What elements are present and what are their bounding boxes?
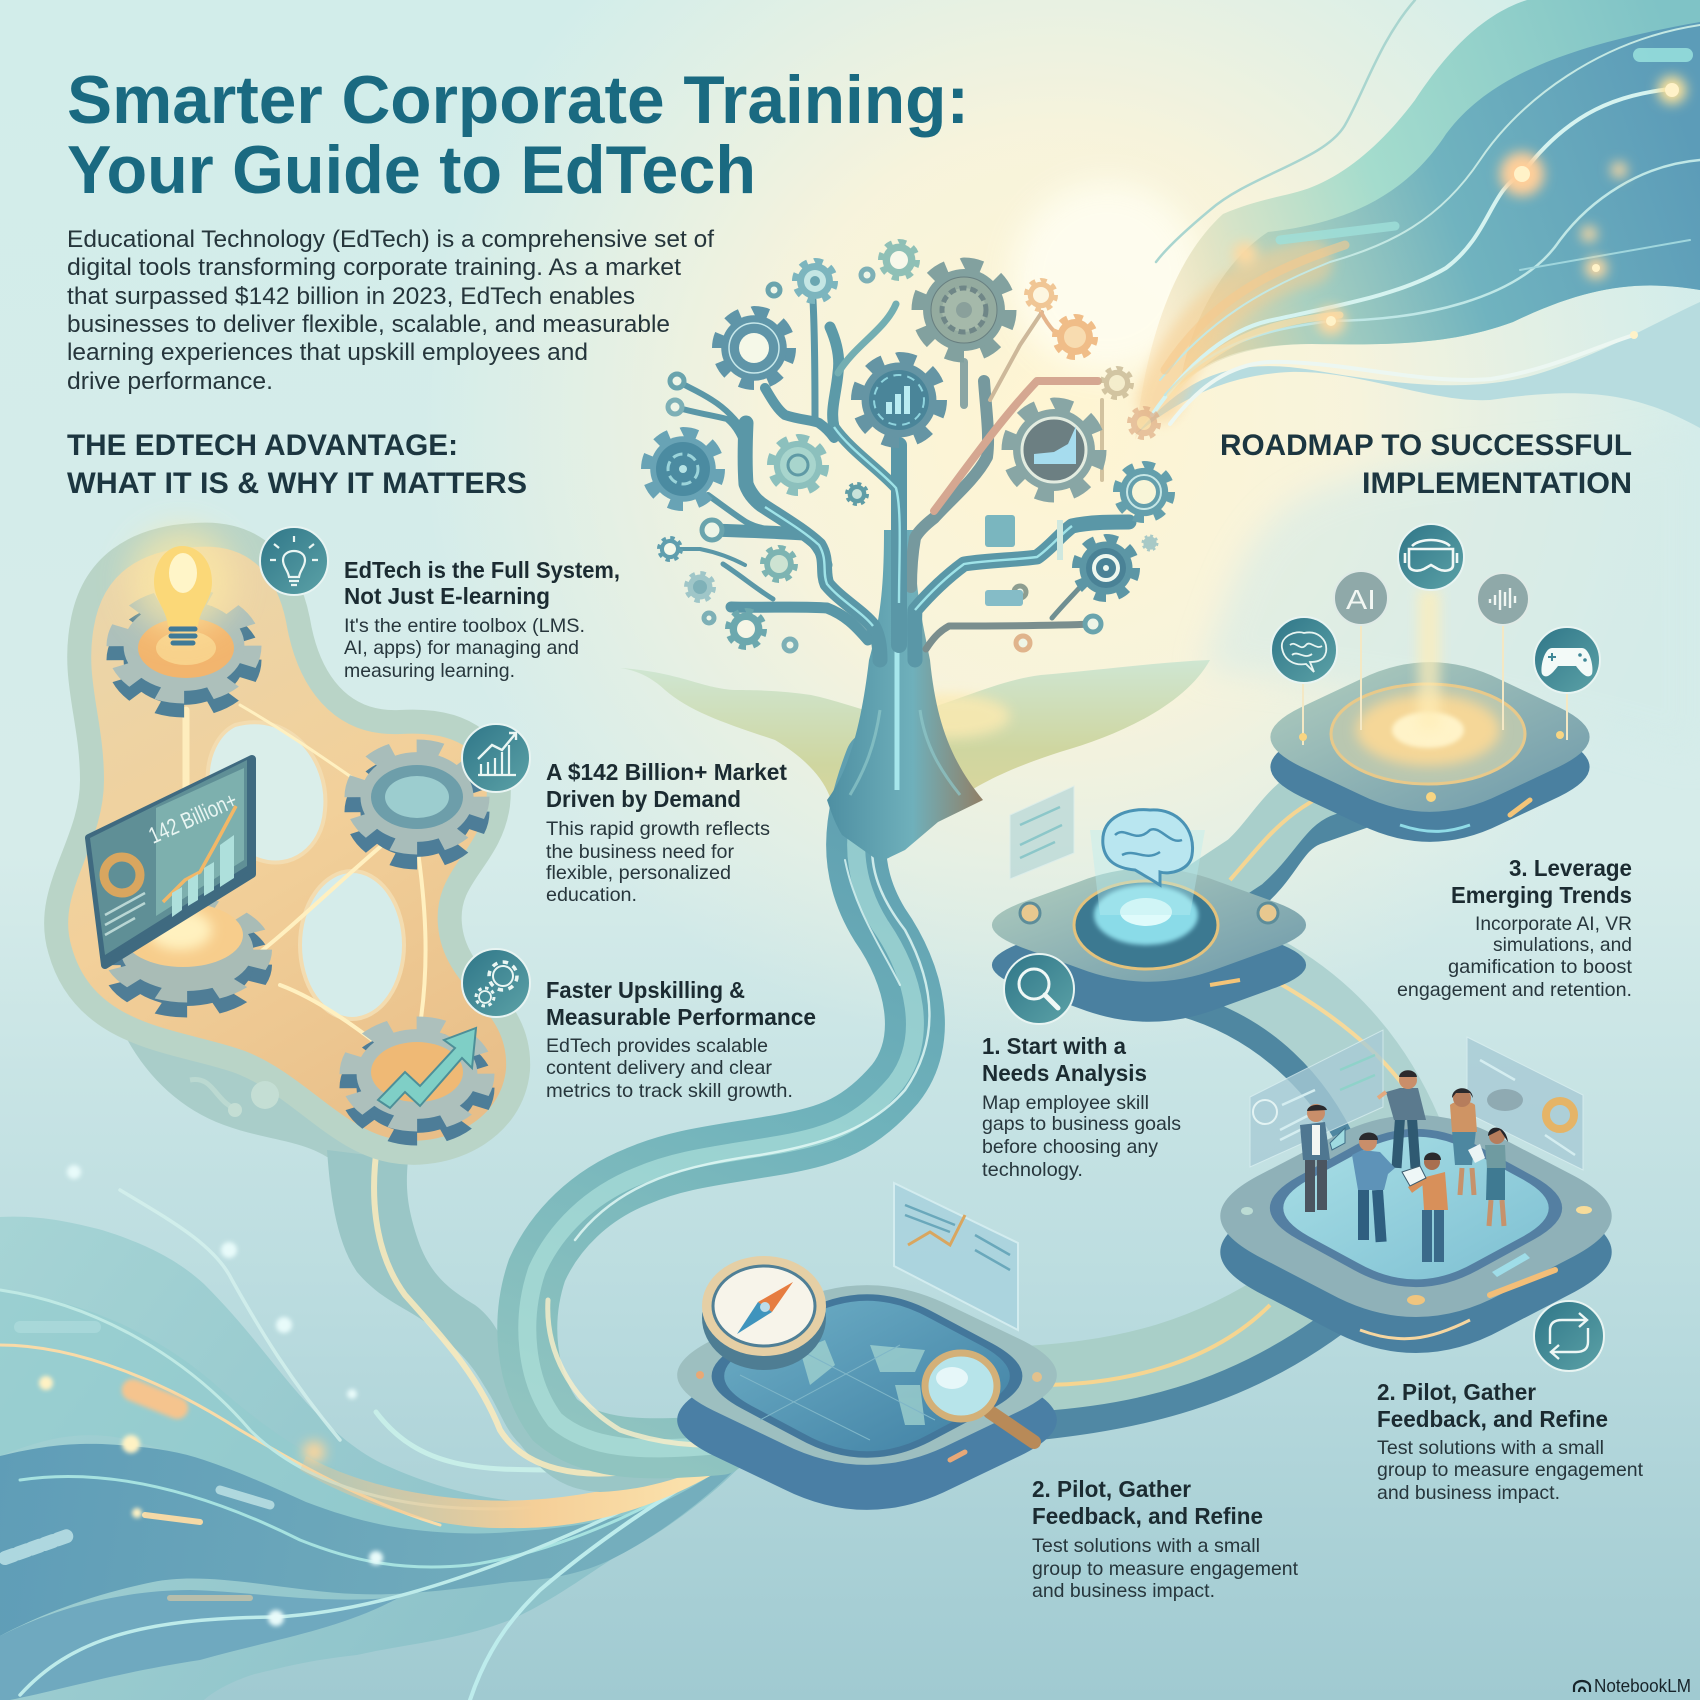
text block: market: This rapid growth reflects <box>546 818 770 840</box>
heading: roadmap <box>1220 429 1632 500</box>
text block: upskilling <box>546 977 816 1102</box>
NotebookLM mark: NotebookLM <box>1594 1676 1691 1696</box>
text block: upskilling: Measurable Performance <box>546 1004 816 1030</box>
text block: full system: It's the entire toolbox (LMS. <box>344 615 585 637</box>
bottom left flowing waves <box>0 1165 770 1700</box>
icon: VR headset badge <box>1398 524 1464 590</box>
intro paragraph: learning experiences that upskill employees and <box>67 339 588 366</box>
intro paragraph: drive performance. <box>67 368 273 395</box>
text block: step 2 lower: and business impact. <box>1032 1580 1215 1602</box>
intro paragraph <box>67 226 714 395</box>
intro paragraph: businesses to deliver flexible, scalable, and measurable <box>67 311 670 338</box>
text block: step 2 right <box>1377 1379 1644 1504</box>
text block: step 3 <box>1397 855 1633 1001</box>
gears on tree canopy <box>649 243 1169 646</box>
text block: market: the business need for <box>546 841 735 863</box>
river flowing from tree <box>527 760 929 1448</box>
text block: step 2 lower: Feedback, and Refine <box>1032 1503 1263 1529</box>
intro paragraph: digital tools transforming corporate training. As a market <box>67 254 681 281</box>
intro paragraph: Educational Technology (EdTech) is a comprehensive set of <box>67 226 714 253</box>
title: Your Guide to EdTech <box>67 132 756 208</box>
icon: chart badge <box>462 724 530 792</box>
magnifying glass <box>925 1353 1034 1442</box>
text block: market <box>546 759 787 906</box>
platform: step 2 team <box>1220 1030 1612 1353</box>
icon: gamepad badge <box>1534 627 1600 693</box>
title <box>67 62 969 208</box>
floating panel left <box>1250 1030 1383 1167</box>
text block: full system: EdTech is the Full System, <box>344 557 620 583</box>
title: Smarter Corporate Training: <box>67 62 969 138</box>
gear: light bulb <box>120 529 248 707</box>
text block: step 1: technology. <box>982 1159 1083 1181</box>
icon: light bulb badge <box>260 527 328 595</box>
hills <box>620 660 1210 830</box>
top right flowing waves <box>1135 0 1700 440</box>
tree <box>649 243 1169 862</box>
hologram brain <box>1103 810 1193 885</box>
icon: brain badge <box>1271 617 1337 683</box>
text block: step 3: engagement and retention. <box>1397 979 1632 1001</box>
text block: step 1: 1. Start with a <box>982 1033 1126 1059</box>
dashboard screen: 142 Billion+: 142 Billion+ <box>144 787 241 849</box>
text block: step 2 right: Test solutions with a small <box>1377 1437 1604 1459</box>
text block: full system <box>344 557 620 682</box>
text block: upskilling: EdTech provides scalable <box>546 1035 768 1057</box>
heading: EdTech advantage: WHAT IT IS & WHY IT MATTERS <box>67 467 527 500</box>
gear: glowing hub <box>117 903 257 1008</box>
text block: step 2 right: 2. Pilot, Gather <box>1377 1379 1536 1405</box>
text block: market: education. <box>546 884 637 906</box>
gear: lens <box>358 750 476 859</box>
text block: market: Driven by Demand <box>546 786 741 812</box>
branches <box>670 300 1129 660</box>
floating document panel <box>1010 786 1074 879</box>
text block: step 3: simulations, and <box>1493 934 1632 956</box>
floating chart panel <box>894 1183 1018 1330</box>
panel: EdTech advantage blob <box>56 529 518 1153</box>
platform: step 1 needs analysis <box>992 786 1306 1022</box>
heading: roadmap: ROADMAP TO SUCCESSFUL <box>1220 429 1632 462</box>
icon: AI badge: AI <box>1346 584 1376 615</box>
blob hole upper <box>208 722 325 863</box>
heading: EdTech advantage: THE EDTECH ADVANTAGE: <box>67 429 458 462</box>
text block: step 2 lower: group to measure engagement <box>1032 1558 1299 1580</box>
blob tail <box>110 1000 765 1492</box>
intro paragraph: that surpassed $142 billion in 2023, EdTech enables <box>67 283 635 310</box>
icon: refresh loop badge <box>1534 1301 1604 1371</box>
platform: step map and compass <box>677 1183 1057 1510</box>
text block: step 2 lower <box>1032 1476 1299 1602</box>
panel: roadmap roads <box>1010 765 1425 1410</box>
platform: step 3 emerging trends <box>1270 590 1590 842</box>
icon: gears badge <box>462 949 530 1017</box>
text block: step 3: Incorporate AI, VR <box>1475 913 1632 935</box>
heading: roadmap: IMPLEMENTATION <box>1362 467 1632 500</box>
text block: step 3: gamification to boost <box>1448 956 1633 978</box>
text block: upskilling: content delivery and clear <box>546 1057 773 1079</box>
text block: step 2 lower: 2. Pilot, Gather <box>1032 1476 1191 1502</box>
chips <box>985 515 1060 606</box>
text block: step 2 right: Feedback, and Refine <box>1377 1406 1608 1432</box>
blob hole lower <box>300 871 404 1019</box>
compass <box>702 1256 826 1370</box>
text block: full system: Not Just E-learning <box>344 583 550 609</box>
text block: upskilling: Faster Upskilling & <box>546 977 745 1003</box>
floating panel right <box>1467 1037 1583 1170</box>
text block: full system: AI, apps) for managing and <box>344 637 579 659</box>
text block: upskilling: metrics to track skill growth. <box>546 1080 793 1102</box>
text block: full system: measuring learning. <box>344 660 515 682</box>
team of people <box>1300 1070 1508 1262</box>
text block: step 2 lower: Test solutions with a small <box>1032 1535 1260 1557</box>
icon: magnifier badge <box>1004 954 1074 1024</box>
trunk and roots <box>827 440 983 862</box>
text block: market: flexible, personalized <box>546 862 731 884</box>
icon: waveform badge <box>1477 573 1529 625</box>
gear: growth arrow <box>353 1027 481 1135</box>
text block: step 1: Needs Analysis <box>982 1060 1147 1086</box>
heading: EdTech advantage <box>67 429 527 500</box>
icon: AI badge <box>1334 571 1388 625</box>
text block: step 3: 3. Leverage <box>1509 855 1632 881</box>
text block: step 2 right: group to measure engagement <box>1377 1459 1644 1481</box>
text block: market: A $142 Billion+ Market <box>546 759 787 785</box>
dashboard screen: 142 Billion+ <box>89 759 252 965</box>
text block: step 1: Map employee skill <box>982 1092 1149 1114</box>
text block: step 1: gaps to business goals <box>982 1113 1181 1135</box>
text block: step 1 <box>982 1033 1181 1181</box>
text block: step 1: before choosing any <box>982 1136 1158 1158</box>
text block: step 3: Emerging Trends <box>1451 882 1632 908</box>
text block: step 2 right: and business impact. <box>1377 1482 1560 1504</box>
